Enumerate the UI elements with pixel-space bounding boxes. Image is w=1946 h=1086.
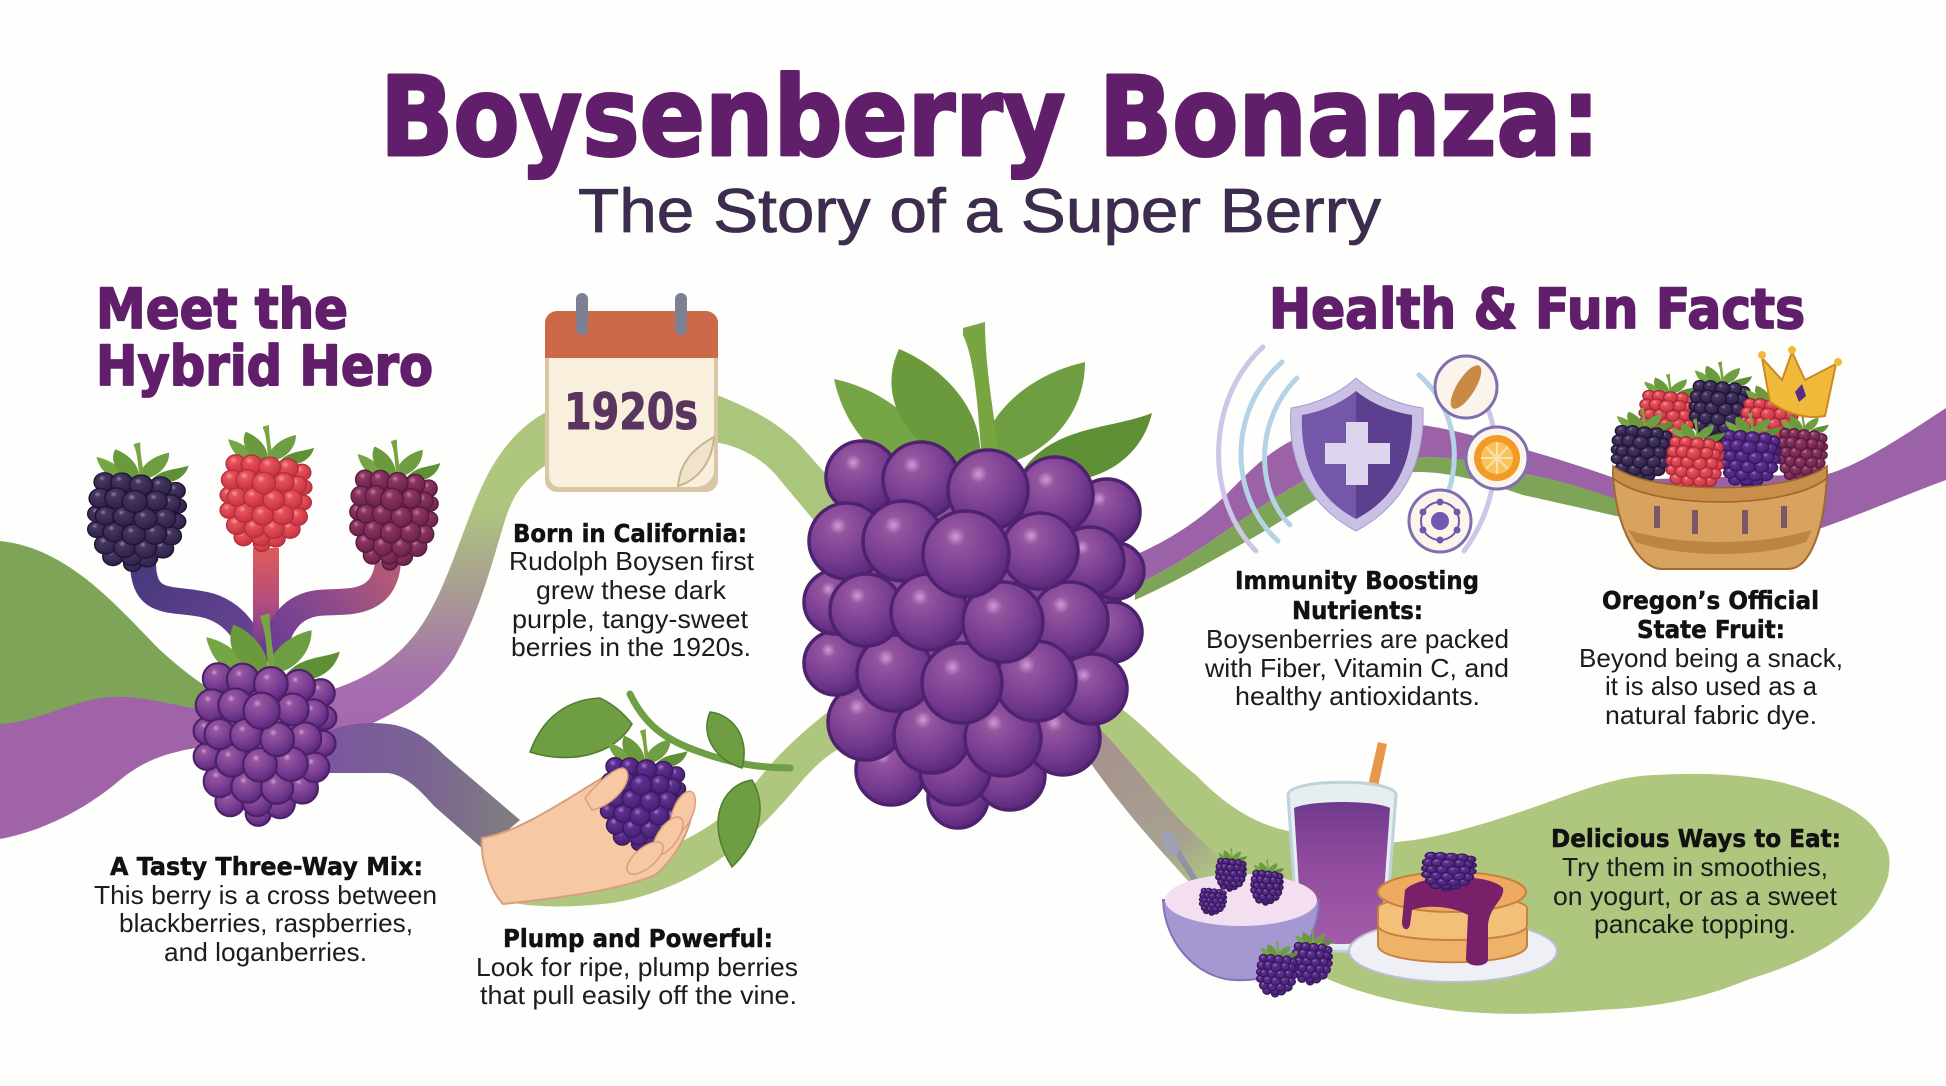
text: born in california: Rudolph Boysen first <box>509 546 755 576</box>
text: plump and powerful: that pull easily off the vine. <box>480 980 797 1010</box>
text: delicious ways to eat: pancake topping. <box>1594 909 1796 939</box>
text: immunity: Immunity Boosting <box>1235 566 1479 595</box>
heading: meet the hybrid hero: Meet the <box>96 277 348 341</box>
central big berry <box>804 322 1152 828</box>
fingers <box>585 768 701 880</box>
heading: meet the hybrid hero <box>96 277 433 398</box>
icon: calendar 1920s: 1920s <box>564 383 698 441</box>
text: three-way mix: This berry is a cross between <box>94 880 437 910</box>
ribbon: left green <box>0 541 215 726</box>
text: oregon state fruit: Oregon’s Official <box>1602 586 1819 615</box>
ribbon: gray strip <box>1085 715 1240 900</box>
text: delicious ways to eat <box>1551 824 1841 939</box>
text: immunity <box>1204 566 1509 711</box>
text: plump and powerful: Look for ripe, plump berries <box>476 952 798 982</box>
text: three-way mix: A Tasty Three-Way Mix: <box>110 852 423 881</box>
ribbon: food blob green <box>1090 700 1890 1014</box>
text: oregon state fruit: it is also used as a <box>1605 671 1818 701</box>
ribbon: lower purple <box>325 723 520 850</box>
flowing ribbons <box>0 393 1946 1014</box>
shield <box>1291 378 1423 531</box>
ribbon: rising to calendar <box>325 410 550 742</box>
text: oregon state fruit: natural fabric dye. <box>1605 700 1817 730</box>
text: oregon state fruit: Beyond being a snack, <box>1579 643 1843 673</box>
ribbon: green right <box>1135 457 1625 600</box>
icon: calendar 1920s <box>545 293 718 492</box>
text: oregon state fruit <box>1579 586 1843 730</box>
heading: health and fun facts: Health & Fun Facts <box>1269 277 1805 341</box>
text: three-way mix <box>94 852 437 967</box>
plus <box>1325 422 1390 485</box>
text: plump and powerful: Plump and Powerful: <box>503 924 773 953</box>
text: three-way mix: blackberries, raspberries, <box>119 908 413 938</box>
ribbon: green under hand <box>500 698 846 906</box>
text: born in california <box>509 519 755 662</box>
icon: smoothie <box>1288 742 1396 951</box>
fiber badge <box>1435 356 1497 418</box>
text: three-way mix: and loganberries. <box>164 937 367 967</box>
icon: loganberry <box>350 439 440 570</box>
tube: raspberry <box>253 548 279 650</box>
icon: yogurt bowl <box>1158 827 1319 980</box>
hand <box>482 772 692 904</box>
text: delicious ways to eat: Try them in smoothies, <box>1562 852 1828 882</box>
text: born in california: purple, tangy-sweet <box>512 604 749 634</box>
molecule badge <box>1409 490 1471 552</box>
orange badge <box>1466 427 1528 489</box>
basket body <box>1613 472 1827 569</box>
text: immunity: Boysenberries are packed <box>1206 624 1509 654</box>
icon: hybrid boysenberry <box>194 613 340 826</box>
ribbon: left purple <box>0 697 215 839</box>
vine <box>630 694 790 768</box>
text: delicious ways to eat: on yogurt, or as a sweet <box>1553 881 1838 911</box>
tube: blackberry <box>143 562 258 665</box>
crown <box>1758 346 1842 417</box>
ribbon: purple right <box>1135 408 1946 585</box>
vine leaves <box>530 698 760 867</box>
text: born in california: grew these dark <box>536 575 727 605</box>
icon: blackberry <box>88 442 189 571</box>
text: immunity: Nutrients: <box>1292 596 1423 625</box>
icon: raspberry <box>220 425 314 552</box>
tubes joining parent berries <box>143 548 388 665</box>
subtitle: The Story of a Super Berry <box>578 177 1381 246</box>
text: born in california: Born in California: <box>513 519 747 548</box>
berry in hand <box>600 729 688 851</box>
text: delicious ways to eat: Delicious Ways to Eat: <box>1551 824 1841 853</box>
text: born in california: berries in the 1920s. <box>511 632 751 662</box>
icon: basket with berries and crown <box>1611 346 1842 569</box>
ribbon: calendar to big berry <box>712 393 840 530</box>
text: plump and powerful <box>476 924 798 1010</box>
title: Boysenberry Bonanza: <box>380 53 1600 181</box>
icon: immunity shield <box>1219 347 1528 552</box>
text: oregon state fruit: State Fruit: <box>1637 615 1785 644</box>
icon: hand with berry and vine <box>482 694 790 904</box>
icon: loose berries <box>1257 929 1333 997</box>
tube: loganberry <box>272 562 388 655</box>
text: immunity: with Fiber, Vitamin C, and <box>1204 653 1509 683</box>
text: immunity: healthy antioxidants. <box>1235 681 1480 711</box>
basket berries <box>1611 361 1829 494</box>
immunity arcs <box>1219 347 1496 551</box>
icon: pancakes <box>1349 852 1557 982</box>
heading: meet the hybrid hero: Hybrid Hero <box>96 334 433 398</box>
